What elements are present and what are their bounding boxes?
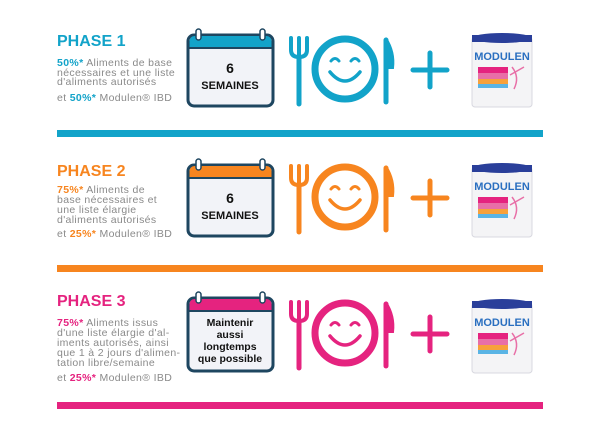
phase 3 calendar: aussi <box>217 329 244 341</box>
phase 1 description: d'aliments autorisés <box>57 76 156 88</box>
phase 1 description: nécessaires et une liste <box>57 67 175 79</box>
phase 2 description: 75%* Aliments de <box>57 184 145 196</box>
phase 3 description: que 1 à 2 jours d'alimen- <box>57 347 181 359</box>
phase 2 title: PHASE 2 <box>57 163 126 180</box>
phase 3 Modulen can <box>472 299 532 373</box>
phase 2 Modulen can <box>472 163 532 237</box>
phase 1 <box>57 29 543 137</box>
phase 3 description: 75%* Aliments issus <box>57 317 158 329</box>
phase 3 fork, plate smiley, knife <box>291 302 447 368</box>
phase 1 title: PHASE 1 <box>57 33 126 50</box>
phase 3 <box>57 292 543 409</box>
phase 3 title: PHASE 3 <box>57 293 126 310</box>
phase 3 description: tation libre/semaine <box>57 357 155 369</box>
phase 1 fork, plate smiley, knife <box>291 38 447 104</box>
phase 3 calendar: que possible <box>198 353 262 365</box>
phase 1 calendar: 6 <box>226 60 234 76</box>
phase 1 description: 50%* Aliments de base <box>57 57 172 69</box>
phase 2 description: d'aliments autorisés <box>57 214 156 226</box>
phase 3 description: d'une liste élargie d'al- <box>57 327 170 339</box>
phase 2 bar <box>57 265 543 272</box>
phase 1 Modulen can <box>472 33 532 107</box>
phase 3 calendar: longtemps <box>203 341 257 353</box>
phase 3 calendar: Maintenir <box>207 317 253 329</box>
phase 2 calendar <box>188 159 273 236</box>
phase 1 calendar <box>188 29 273 106</box>
phase 2 description: et 25%* Modulen® IBD <box>57 228 172 240</box>
phase 2 fork, plate smiley, knife <box>291 166 447 232</box>
phase 2 <box>57 159 543 272</box>
phase 3 description: iments autorisés, ainsi <box>57 337 169 349</box>
phase 1 bar <box>57 130 543 137</box>
phase 3 bar <box>57 402 543 409</box>
phase 3 calendar <box>188 292 273 371</box>
phase 3 description: et 25%* Modulen® IBD <box>57 372 172 384</box>
phase 1 calendar: SEMAINES <box>201 80 259 92</box>
phase 2 calendar: 6 <box>226 190 234 206</box>
phase 2 calendar: SEMAINES <box>201 210 259 222</box>
phase 2 description: base nécessaires et <box>57 194 157 206</box>
phase 1 description: et 50%* Modulen® IBD <box>57 92 172 104</box>
phase 2 description: une liste élargie <box>57 204 136 216</box>
